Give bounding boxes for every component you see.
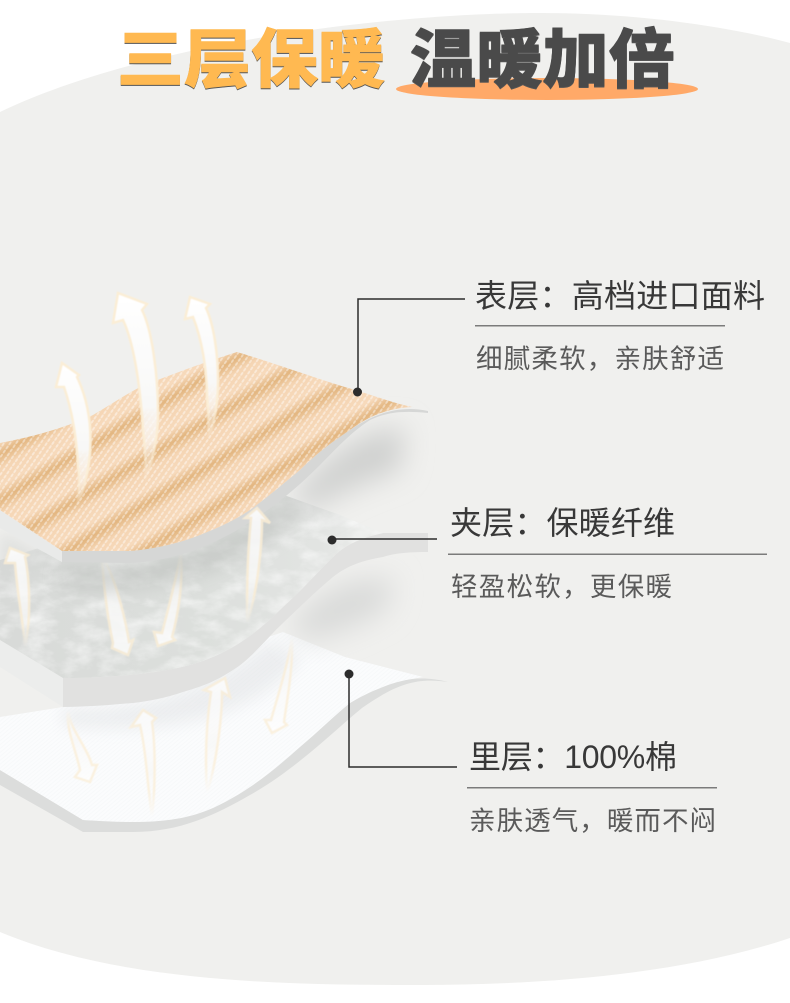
outer layer left edge (0, 510, 62, 562)
middle layer thickness (0, 640, 63, 707)
heat arrows over outer layer (56, 293, 218, 507)
inner layer surface (0, 632, 423, 822)
leader dot inner (344, 670, 354, 678)
layer: outer fabric (0, 352, 428, 563)
leader line middle (332, 538, 437, 540)
layer: inner cotton (0, 632, 448, 832)
leader dot outer (353, 388, 362, 396)
middle layer heat arrows (102, 552, 181, 655)
inner divider (467, 787, 717, 788)
leader dot middle (328, 536, 336, 544)
inner layer heat arrows (68, 637, 292, 817)
title left text: 三层保暖 (117, 9, 385, 101)
inner heading: 里层：100%棉 (469, 732, 677, 778)
title right text: 温暖加倍 (410, 9, 675, 101)
outer layer surface (0, 352, 412, 551)
outer divider (475, 325, 725, 326)
outer layer thickness (62, 409, 428, 563)
title highlight ellipse (396, 78, 698, 100)
title (117, 9, 698, 101)
shadow under top layer (0, 428, 405, 591)
inner description: 亲肤透气，暖而不闷 (469, 806, 716, 836)
middle layer surface (0, 496, 352, 678)
callout: outer layer (353, 271, 765, 396)
inner layer shadow from middle layer (70, 645, 287, 727)
leader line outer (358, 299, 465, 392)
callout: inner layer (344, 670, 717, 836)
middle heading: 夹层：保暖纤维 (450, 498, 675, 544)
shadow under middle layer (290, 579, 395, 640)
outer heading: 表层：高档进口面料 (475, 271, 765, 317)
callout: middle layer (328, 498, 767, 602)
outer description: 细腻柔软，亲肤舒适 (476, 344, 724, 374)
layer: warm fibre (0, 480, 428, 707)
inner layer thickness (0, 679, 448, 832)
heat arrows over middle layer (5, 508, 270, 647)
leader line inner (349, 674, 457, 767)
middle divider (448, 554, 767, 555)
middle description: 轻盈松软，更保暖 (451, 572, 672, 602)
